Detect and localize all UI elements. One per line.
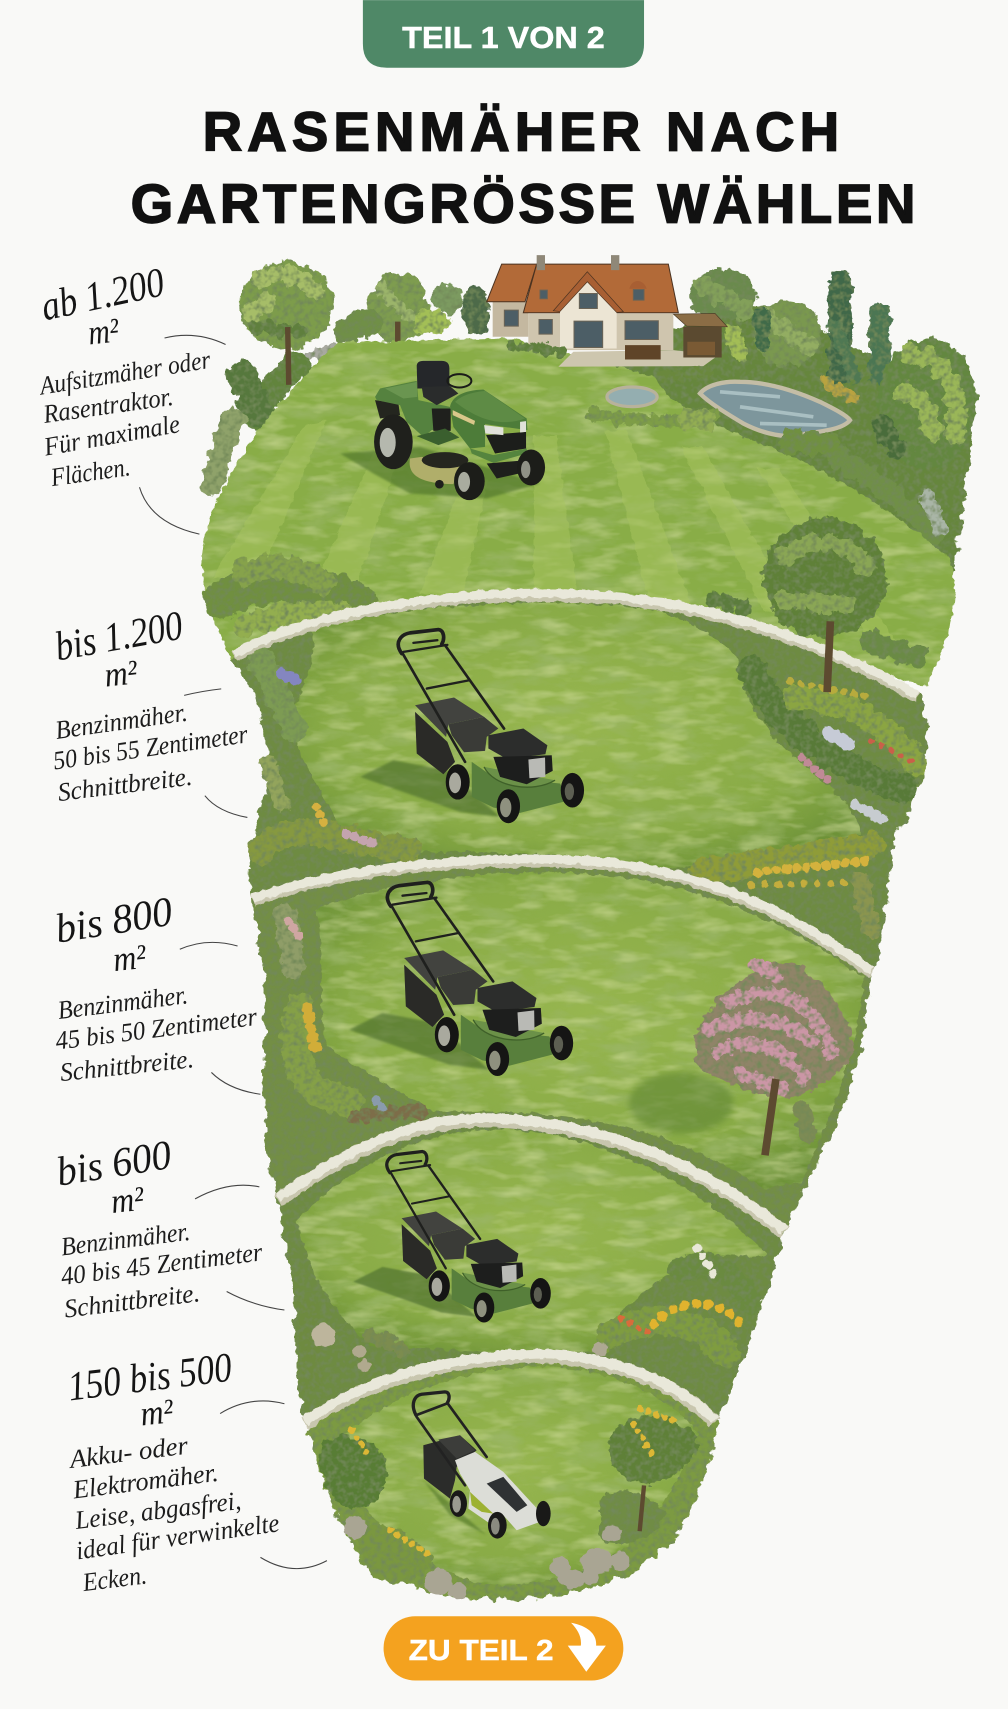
house front shrubs [512, 347, 708, 376]
label: bis 800 m²: m² [111, 937, 148, 979]
section 2 flowers [281, 674, 915, 885]
label: ab 1.200 m²: Flächen. [48, 452, 132, 492]
label: bis 600 m²: Schnittbreite. [63, 1278, 201, 1324]
pink flowering tree [695, 963, 855, 1144]
badge: Teil 1 von 2 [363, 0, 644, 68]
lawn 2 [292, 603, 860, 870]
label: 150 bis 500 m²: ideal für verwinkelte [74, 1508, 281, 1565]
label: bis 600 m²: bis 600 [53, 1131, 175, 1195]
section 5 flowers and stones [343, 1409, 680, 1599]
icon: curved down arrow [568, 1623, 606, 1672]
mower 600 [353, 1152, 551, 1322]
title: GARTENGRÖSSE WÄHLEN [131, 173, 915, 234]
section 4 plants [311, 1264, 752, 1384]
section 5 plants [320, 1415, 700, 1584]
label: bis 800 m²: bis 800 [52, 888, 176, 952]
garden section 2: petrol mower up to 1200 sqm [231, 519, 927, 972]
garden section 3: petrol mower up to 800 sqm [253, 859, 872, 1232]
label: bis 600 m² [53, 1131, 284, 1324]
section 4 beds [278, 1119, 785, 1422]
section 4 flowers and stones [324, 1248, 741, 1368]
mower 1200 [360, 630, 584, 823]
label: bis 1.200 m²: m² [102, 652, 140, 695]
garden section 5: battery or electric mower [305, 1354, 717, 1600]
pond: large [700, 382, 850, 436]
lawn 1 [202, 338, 954, 687]
label: ab 1.200 m²: ab 1.200 [37, 258, 168, 329]
label: ab 1.200 m² [36, 258, 226, 534]
path 4 [305, 1354, 715, 1423]
section 2 beds [231, 593, 927, 972]
path 2 [253, 859, 872, 973]
title [131, 102, 915, 234]
mower 800 [349, 882, 573, 1076]
section 3 plants [286, 916, 430, 1117]
bush: lower left and foreground [223, 567, 926, 659]
label: 150 bis 500 m²: m² [138, 1391, 176, 1433]
label: 150 bis 500 m²: Ecken. [80, 1560, 148, 1597]
lawn stripes [212, 420, 904, 654]
label: 150 bis 500 m² [65, 1344, 327, 1597]
label: bis 1.200 m²: bis 1.200 [51, 602, 186, 669]
section 2 flower beds [262, 659, 915, 937]
button: zu Teil 2: ZU TEIL 2 [409, 1635, 554, 1667]
label: ab 1.200 m²: Für maximale [41, 409, 182, 462]
title: RASENMÄHER NACH [203, 102, 839, 163]
section 3 beds [253, 860, 872, 1232]
label: bis 1.200 m² [51, 602, 250, 817]
tree trunk [827, 621, 830, 692]
tree trunk [765, 1079, 776, 1155]
label: 150 bis 500 m²: Akku- oder [66, 1431, 190, 1474]
tree shadow [629, 1072, 733, 1133]
section 3 flowers [289, 921, 387, 1112]
label: bis 800 m² [52, 888, 260, 1094]
background trees and shrubs [209, 261, 976, 572]
badge: Teil 1 von 2: TEIL 1 VON 2 [402, 21, 605, 55]
label: 150 bis 500 m²: Leise, abgasfrei, [73, 1486, 242, 1535]
tree trunks back [288, 322, 398, 385]
ride-on tractor [340, 361, 545, 500]
lawn 5 [332, 1367, 697, 1586]
label: ab 1.200 m²: m² [86, 310, 121, 352]
label: bis 800 m²: Schnittbreite. [59, 1044, 195, 1087]
label: 150 bis 500 m²: 150 bis 500 [65, 1344, 234, 1409]
path 1 [234, 593, 918, 698]
label: bis 1.200 m²: Benzinmäher. [53, 698, 189, 745]
label: bis 600 m²: Benzinmäher. [59, 1217, 192, 1261]
pond shrubs [594, 414, 828, 445]
label: bis 1.200 m²: Schnittbreite. [56, 762, 194, 807]
label: bis 800 m²: Benzinmäher. [56, 980, 189, 1025]
house [487, 255, 727, 367]
tree trunk [640, 1485, 644, 1531]
pond: small [607, 387, 657, 407]
label: bis 600 m²: m² [109, 1179, 146, 1221]
tree on path 1 [763, 519, 887, 637]
section 5 base [305, 1355, 717, 1600]
lawn 4 [296, 1129, 766, 1354]
garden section 4: petrol mower up to 600 sqm [278, 1118, 785, 1422]
electric mower [413, 1392, 551, 1539]
label: bis 600 m²: 40 bis 45 Zentimeter [59, 1237, 265, 1291]
label: ab 1.200 m²: Aufsitzmäher oder [36, 345, 213, 401]
button: zu Teil 2 [384, 1616, 623, 1681]
label: ab 1.200 m²: Rasentraktor. [41, 382, 175, 429]
label: bis 1.200 m²: 50 bis 55 Zentimeter [51, 719, 250, 775]
label: 150 bis 500 m²: Elektromäher. [70, 1458, 220, 1505]
garden section 1: large lawn with house and tractor [202, 255, 976, 687]
lawn 3 [316, 872, 863, 1188]
label: bis 800 m²: 45 bis 50 Zentimeter [54, 1002, 259, 1056]
path 3 [278, 1118, 785, 1233]
